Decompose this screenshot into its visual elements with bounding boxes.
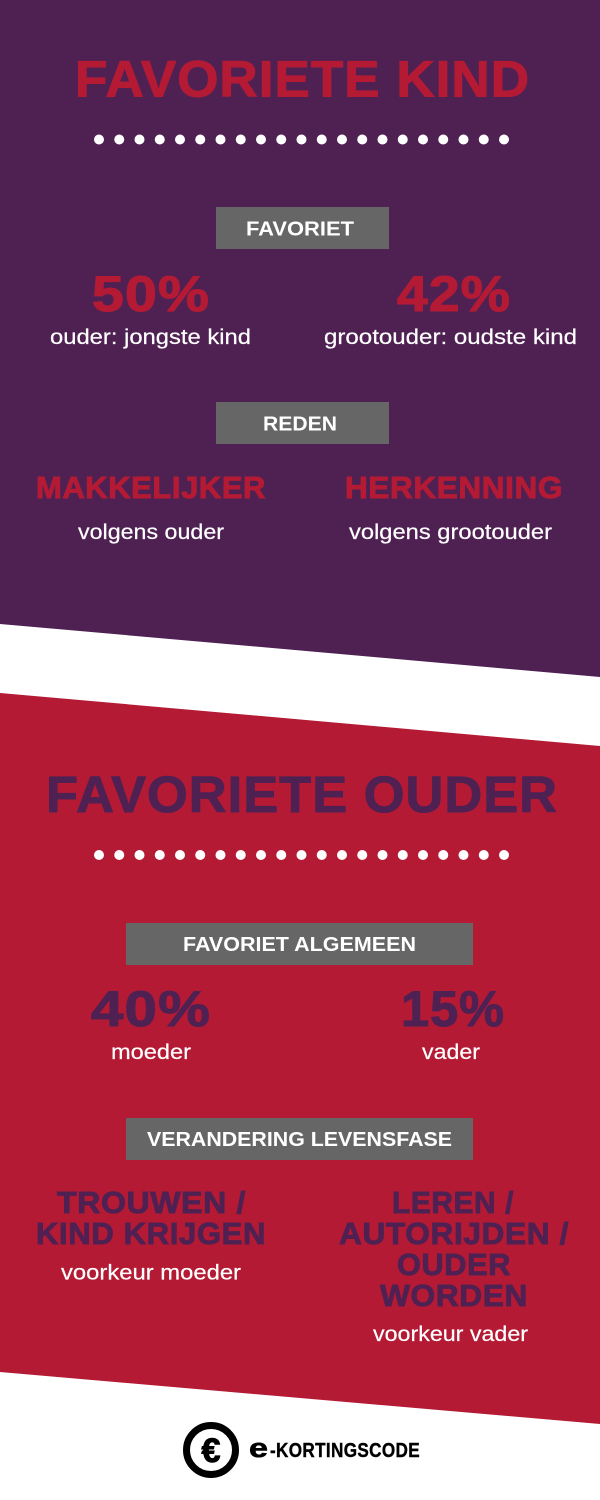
change: trouwen / kind krijgen: [36, 1185, 266, 1284]
wordmark: [249, 1433, 420, 1463]
stat: 42%: [324, 266, 577, 349]
wordmark: -KORTINGSCODE: [270, 1440, 420, 1462]
panel: favoriete ouder: [0, 693, 600, 1424]
label: favoriet: [216, 207, 389, 249]
stat: 15%: 15%: [401, 981, 505, 1037]
stat: 15%: [401, 981, 505, 1064]
stat: 40%: 40%: [91, 981, 211, 1037]
change: leren / autorijden / ouder worden: [339, 1185, 569, 1346]
icon: euro coin: [186, 1426, 236, 1474]
logo: e-kortingscode: [186, 1426, 420, 1474]
title: favoriete kind: FAVORIETE KIND: [75, 50, 530, 108]
stat: 50%: [50, 266, 251, 349]
reason: makkelijker: [36, 470, 266, 544]
label: verandering levensfase: [126, 1118, 473, 1160]
title: favoriete ouder: FAVORIETE OUDER: [46, 766, 558, 823]
reason: herkenning: [345, 470, 563, 544]
icon: euro coin: €: [202, 1432, 221, 1470]
label: reden: [216, 402, 389, 444]
change: trouwen / kind krijgen: voorkeur moeder: [61, 1262, 241, 1284]
dotted divider: [94, 850, 509, 860]
label: verandering levensfase: VERANDERING LEVENSFASE: [147, 1129, 452, 1151]
stat: 42%: grootouder: oudste kind: [324, 326, 577, 349]
change: leren / autorijden / ouder worden: OUDER: [397, 1247, 511, 1282]
reason: herkenning: HERKENNING: [345, 470, 563, 505]
label: favoriet: FAVORIET: [246, 218, 354, 240]
stat: 40%: moeder: [111, 1041, 191, 1064]
change: leren / autorijden / ouder worden: WORDEN: [380, 1278, 528, 1313]
change: leren / autorijden / ouder worden: LEREN /: [392, 1185, 514, 1220]
stat: 40%: [91, 981, 211, 1064]
reason: makkelijker: MAKKELIJKER: [36, 470, 266, 505]
label: favoriet algemeen: [126, 923, 473, 965]
label: reden: REDEN: [263, 414, 337, 436]
stat: 50%: ouder: jongste kind: [50, 326, 251, 349]
change: leren / autorijden / ouder worden: voorkeur vader: [373, 1323, 528, 1346]
dotted divider: [94, 134, 509, 144]
change: trouwen / kind krijgen: TROUWEN /: [57, 1185, 246, 1220]
change: leren / autorijden / ouder worden: AUTORIJDEN /: [339, 1216, 569, 1251]
wordmark: e: [249, 1433, 268, 1463]
change: trouwen / kind krijgen: KIND KRIJGEN: [36, 1216, 266, 1251]
label: favoriet algemeen: FAVORIET ALGEMEEN: [183, 934, 416, 956]
panel: favoriete kind: [0, 0, 600, 677]
reason: makkelijker: volgens ouder: [78, 521, 224, 544]
stat: 50%: 50%: [92, 266, 210, 322]
stat: 42%: 42%: [397, 266, 511, 322]
stat: 15%: vader: [422, 1041, 480, 1064]
reason: herkenning: volgens grootouder: [349, 521, 552, 544]
